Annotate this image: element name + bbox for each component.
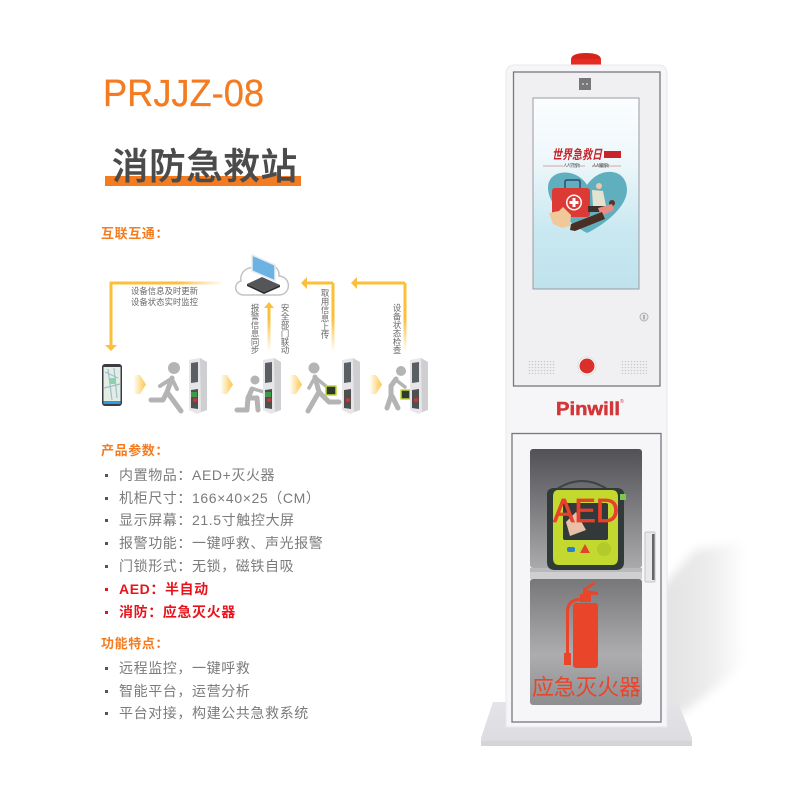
parameter list: 报警功能：一键呼救、声光报警 (119, 535, 323, 551)
floor shadow (660, 540, 750, 713)
parameter list: 门锁形式：无锁，磁铁自吸 (119, 558, 294, 574)
poster rescuer and patient (570, 183, 615, 231)
brand logo: Pinwill (556, 399, 620, 419)
poster title: 世界急救日 (552, 147, 603, 162)
caption: department linkage: 安 (281, 303, 289, 313)
icon: cloud platform with monitor (236, 255, 288, 295)
caption: usage info upload: 取 (321, 288, 330, 298)
label: fire extinguisher: 应急灭火器 (532, 675, 641, 700)
product name heading with underline: 消防急救站 (112, 146, 297, 187)
caption: usage info upload: 传 (321, 330, 329, 340)
caption: device monitoring: 设备状态实时监控 (131, 297, 199, 307)
icon: mini kiosk (263, 358, 281, 414)
icon: person pressing alarm (237, 376, 264, 410)
caption: status check: 态 (393, 328, 402, 338)
poster slogan: 人人懂急救 (592, 162, 610, 169)
caption: alarm sync: 警 (251, 312, 260, 322)
parameter list: 内置物品：AED+灭火器 (119, 467, 275, 483)
heading: product parameters: 产品参数： (101, 443, 169, 458)
poster bandage (549, 207, 571, 228)
heading: features: 功能特点： (101, 636, 169, 651)
icon: mini kiosk (342, 358, 360, 414)
icon: mini kiosk (189, 358, 207, 414)
lower door (512, 434, 661, 722)
feature list: 平台对接，构建公共急救系统 (119, 705, 309, 721)
caption: alarm sync: 信 (251, 320, 259, 330)
cabinet body (506, 65, 667, 727)
caption: usage info upload: 用 (321, 296, 329, 306)
icon: mini kiosk (410, 358, 428, 414)
heading: interconnection: 互联互通： (101, 226, 169, 241)
parameter list (105, 467, 323, 620)
AED label: AED (553, 492, 619, 529)
upper panel (514, 72, 660, 386)
caption: alarm sync: 息 (251, 328, 259, 338)
touch screen poster (533, 98, 639, 289)
arrow: sync up to cloud (264, 302, 274, 352)
caption: status check: 设 (393, 303, 402, 313)
icon: person taking AED (308, 362, 339, 411)
flow diagram (102, 255, 428, 414)
glass window (530, 449, 642, 705)
info icon (640, 313, 648, 321)
arrow: cloud to phone (105, 283, 222, 351)
poster slogan: 人人学急救 (563, 162, 580, 169)
caption: status check: 状 (393, 320, 402, 330)
caption: alarm sync: 步 (251, 345, 259, 355)
product: emergency station cabinet (481, 53, 750, 746)
feature list: 远程监控，一键呼救 (119, 660, 250, 676)
brand logo: ® (620, 398, 624, 405)
caption: department linkage: 门 (281, 328, 289, 338)
caption: alarm sync: 报 (251, 303, 260, 313)
caption: department linkage: 联 (281, 337, 290, 347)
caption: department linkage: 动 (281, 345, 289, 355)
icon: person checking kiosk (387, 366, 410, 408)
caption: department linkage: 部 (281, 320, 289, 330)
icon: phone with map (102, 364, 122, 406)
caption: usage info upload: 息 (321, 314, 329, 324)
AED device (547, 481, 626, 570)
poster heart (548, 172, 627, 233)
caption: status check: 检 (393, 337, 402, 347)
arrow: usage info to cloud (301, 277, 334, 352)
camera (579, 78, 591, 90)
parameter list: 显示屏幕：21.5寸触控大屏 (119, 512, 295, 528)
caption: status check: 备 (393, 312, 402, 322)
arrow: status check to cloud (351, 277, 406, 352)
caption: usage info upload: 上 (321, 322, 329, 332)
caption: alarm sync: 同 (251, 337, 259, 347)
parameter list: AED：半自动 (119, 581, 209, 597)
caption: device monitoring: 设备信息及时更新 (131, 286, 199, 296)
speaker left (528, 361, 555, 374)
caption: usage info upload: 信 (321, 305, 329, 315)
caption: department linkage: 全 (281, 312, 290, 322)
icon: fire extinguisher (564, 581, 598, 668)
parameter list: 消防：应急灭火器 (119, 604, 236, 620)
door handle (645, 532, 655, 582)
feature list: 智能平台，运营分析 (119, 683, 250, 699)
feature list (105, 660, 309, 721)
icon: person running to kiosk (151, 362, 181, 411)
call button (578, 357, 596, 375)
model number title: PRJJZ-08 (103, 73, 264, 115)
parameter list: 机柜尺寸：166×40×25（CM） (119, 490, 320, 506)
poster slogan (543, 162, 621, 169)
poster medical kit (552, 180, 590, 217)
caption: status check: 查 (393, 345, 402, 355)
icon: chevrons (134, 375, 382, 394)
base plate (481, 702, 692, 746)
caption: device monitoring (131, 286, 199, 307)
speaker right (620, 361, 647, 374)
red alarm light (571, 53, 601, 65)
